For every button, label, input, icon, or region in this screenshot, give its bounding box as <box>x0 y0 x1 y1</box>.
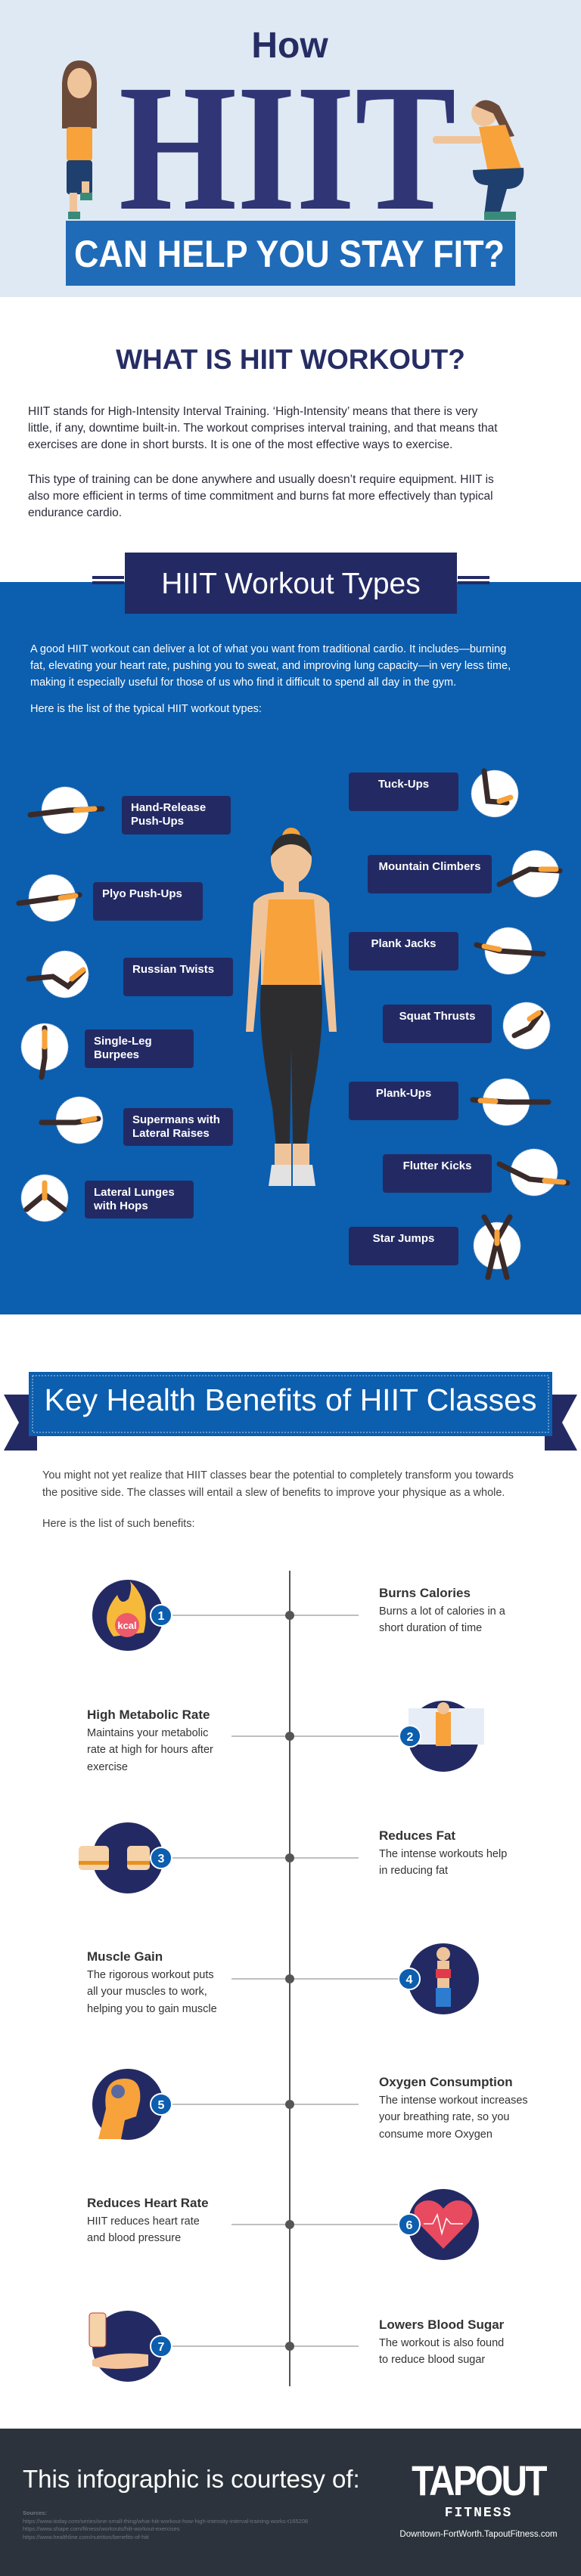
text block: benefits intro: the positive side. The classes will entail a slew of benefits to improve your physique as a whole. <box>42 1486 505 1498</box>
label: Supermans with Lateral Raises: Supermans with <box>132 1113 220 1126</box>
label: Hand-Release Push-Ups <box>122 796 231 834</box>
benefit 5 text: your breathing rate, so you <box>379 2111 510 2123</box>
label: Supermans with Lateral Raises: Lateral Raises <box>132 1127 210 1140</box>
benefit 4 text <box>87 1949 217 2015</box>
logo: Tapout Fitness <box>399 2457 558 2539</box>
banner: Key Health Benefits <box>4 1372 577 1451</box>
timeline: 7 <box>158 2341 165 2354</box>
text block: intro: fat, elevating your heart rate, pushing you to sweat, and improving lung capacity—in very less time, <box>30 660 511 672</box>
label: Hand-Release Push-Ups: Hand-Release <box>131 801 206 814</box>
courtesy text: This infographic is courtesy of: <box>23 2465 360 2493</box>
benefit 2 text: High Metabolic Rate <box>87 1708 210 1722</box>
sources <box>23 2509 308 2540</box>
timeline: 1 <box>158 1610 165 1623</box>
benefit 4 text: The rigorous workout puts <box>87 1968 214 1980</box>
label: Single-Leg Burpees: Single-Leg <box>94 1035 152 1048</box>
label: Plyo Push-Ups <box>93 882 203 921</box>
text block: benefits intro <box>42 1469 514 1530</box>
label: Russian Twists: Russian Twists <box>132 963 214 976</box>
logo: Tapout Fitness: FITNESS <box>445 2506 512 2521</box>
icon: muscle <box>408 1943 479 2014</box>
label: Squat Thrusts <box>383 1005 492 1043</box>
text block: HIIT definition <box>28 405 498 519</box>
label: Lateral Lunges with Hops: with Hops <box>94 1200 148 1212</box>
text block: intro <box>30 643 511 689</box>
text block: HIIT definition: This type of training can be done anywhere and usually doesn’t require equipment. HIIT is <box>28 473 494 486</box>
benefit 5 text <box>379 2075 528 2141</box>
benefit 5 text: consume more Oxygen <box>379 2129 492 2141</box>
benefit 2 text <box>87 1708 213 1773</box>
heading: HIIT Workout Types: HIIT Workout Types <box>161 568 421 600</box>
number badges <box>151 1605 421 2357</box>
logo: Tapout Fitness: TAPOUT <box>412 2457 545 2504</box>
icon: oxygen <box>92 2069 163 2140</box>
title: HIIT: HIIT <box>119 47 456 248</box>
label: Mountain Climbers <box>368 855 492 893</box>
benefit 4 text: helping you to gain muscle <box>87 2003 217 2015</box>
icon: center woman figure <box>246 828 337 1186</box>
icon: reduces fat <box>79 1822 163 1893</box>
sources: https://www.healthline.com/nutrition/benefits-of-hiit <box>23 2534 149 2540</box>
label: Supermans with Lateral Raises <box>123 1108 233 1146</box>
benefit 7 text: The workout is also found <box>379 2337 504 2349</box>
label: Squat Thrusts: Squat Thrusts <box>399 1010 475 1023</box>
title: How: How <box>251 26 328 66</box>
timeline: 5 <box>158 2099 165 2112</box>
icon: heart <box>408 2189 479 2260</box>
benefit 1 text: Burns Calories <box>379 1586 471 1600</box>
label: Flutter Kicks: Flutter Kicks <box>403 1160 471 1172</box>
benefit 7 text: Lowers Blood Sugar <box>379 2317 504 2332</box>
text block: intro: A good HIIT workout can deliver a lot of what you want from traditional cardio. It includes—burning <box>30 643 506 655</box>
label: Lateral Lunges with Hops <box>85 1181 194 1218</box>
benefit 3 text: in reducing fat <box>379 1865 448 1877</box>
benefit 7 text <box>379 2317 504 2366</box>
benefit 1 text <box>379 1586 505 1634</box>
label: Plank-Ups <box>349 1082 458 1120</box>
sources: https://www.today.com/series/one-small-thing/what-hiit-workout-how-high-intensity-interval-training-works-t165208 <box>23 2517 308 2525</box>
label: Tuck-Ups <box>349 772 458 811</box>
icon: standing woman <box>62 60 97 219</box>
subtitle bar: CAN HELP YOU STAY FIT? <box>74 233 505 275</box>
benefit 2 text: Maintains your metabolic <box>87 1726 208 1738</box>
text block: HIIT definition: exercises are done in short bursts. It is one of the most effective ways to exercise. <box>28 438 452 451</box>
label: Hand-Release Push-Ups: Push-Ups <box>131 815 184 828</box>
benefit 6 text <box>87 2196 209 2244</box>
timeline: 2 <box>407 1731 414 1744</box>
benefit 4 text: Muscle Gain <box>87 1949 163 1964</box>
label: Tuck-Ups: Tuck-Ups <box>378 778 429 791</box>
label: Star Jumps <box>349 1227 458 1265</box>
timeline: 4 <box>406 1974 413 1986</box>
label: Plank Jacks <box>349 932 458 971</box>
benefit 3 text: The intense workouts help <box>379 1847 507 1859</box>
timeline <box>79 1571 484 2386</box>
banner: Key Health Benefits: Key Health Benefits of HIIT Classes <box>44 1382 536 1417</box>
text block: list intro: Here is the list of the typical HIIT workout types: <box>30 703 262 715</box>
label: Plank Jacks: Plank Jacks <box>371 937 436 950</box>
benefit 7 text: to reduce blood sugar <box>379 2354 485 2366</box>
text block: benefits intro: You might not yet realize that HIIT classes bear the potential to completely transform you towards <box>42 1469 514 1482</box>
icon: metabolic <box>408 1701 484 1772</box>
benefit 1 text: short duration of time <box>379 1622 482 1634</box>
benefit 6 text: HIIT reduces heart rate <box>87 2215 200 2227</box>
benefit 5 text: The intense workout increases <box>379 2094 528 2106</box>
footer <box>0 2429 581 2576</box>
label: Single-Leg Burpees: Burpees <box>94 1048 139 1061</box>
benefit 1 text: Burns a lot of calories in a <box>379 1605 505 1618</box>
text block: HIIT definition: also more efficient in terms of time commitment and burns fat more effectively than typical <box>28 490 493 503</box>
label: Star Jumps: Star Jumps <box>373 1232 434 1245</box>
label: Flutter Kicks <box>383 1154 492 1193</box>
icon: calories: kcal <box>117 1620 137 1631</box>
icon: squatting woman <box>433 100 524 220</box>
timeline: 3 <box>158 1853 165 1865</box>
timeline: 6 <box>406 2219 413 2232</box>
benefit 6 text: Reduces Heart Rate <box>87 2196 209 2210</box>
icon: blood sugar <box>89 2311 163 2382</box>
label: Russian Twists <box>123 958 233 996</box>
label: Mountain Climbers: Mountain Climbers <box>378 860 481 873</box>
benefit 2 text: exercise <box>87 1761 128 1773</box>
benefit 2 text: rate at high for hours after <box>87 1744 213 1756</box>
benefit 3 text: Reduces Fat <box>379 1828 455 1843</box>
benefit 5 text: Oxygen Consumption <box>379 2075 513 2089</box>
heading: HIIT Workout Types <box>125 553 457 614</box>
benefit 4 text: all your muscles to work, <box>87 1986 207 1998</box>
label: Plyo Push-Ups: Plyo Push-Ups <box>102 887 182 900</box>
sources: Sources: <box>23 2509 47 2516</box>
sources: https://www.shape.com/fitness/workouts/hiit-workout-exercises <box>23 2525 180 2532</box>
heading: What is HIIT workout: WHAT IS HIIT WORKOUT? <box>116 344 465 375</box>
label: Plank-Ups: Plank-Ups <box>376 1087 431 1100</box>
icon: calories <box>92 1580 163 1651</box>
logo: Tapout Fitness: Downtown-FortWorth.TapoutFitness.com <box>399 2530 558 2539</box>
label: Single-Leg Burpees <box>85 1029 194 1068</box>
text block: intro: making it especially useful for those of us who find it difficult to spend all day in the gym. <box>30 677 456 689</box>
panel: workout types <box>0 553 581 1314</box>
label: Lateral Lunges with Hops: Lateral Lunges <box>94 1186 175 1199</box>
benefit 3 text <box>379 1828 507 1877</box>
text block: HIIT definition: HIIT stands for High-Intensity Interval Training. ‘High-Intensity’ means that there is very <box>28 405 477 418</box>
subtitle bar <box>66 221 515 286</box>
hero header <box>0 0 581 297</box>
text block: HIIT definition: endurance cardio. <box>28 506 122 519</box>
text block: HIIT definition: little, if any, downtime built-in. The workout comprises interval training, and that means that <box>28 422 498 435</box>
text block: benefits intro: Here is the list of such benefits: <box>42 1518 195 1530</box>
benefit 6 text: and blood pressure <box>87 2232 181 2244</box>
exercise icons <box>17 768 570 1280</box>
